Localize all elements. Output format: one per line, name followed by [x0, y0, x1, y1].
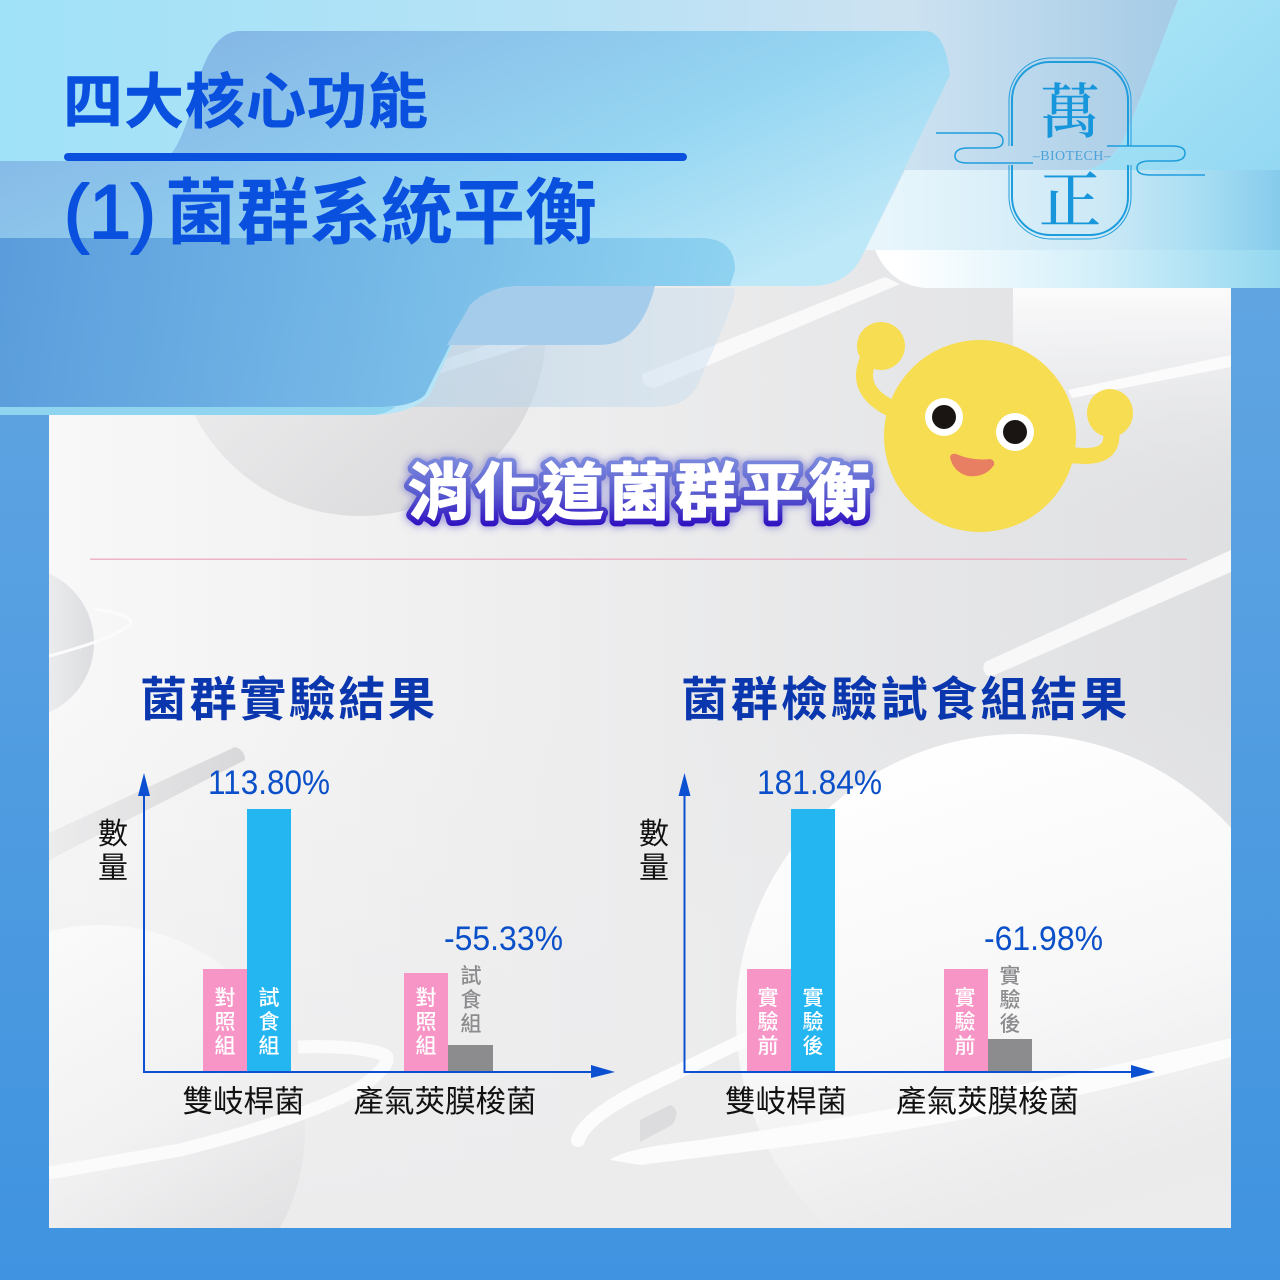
bars: 雙岐桿菌: 組 — [214, 1030, 236, 1060]
divider line — [90, 558, 1187, 560]
axes — [138, 773, 615, 1078]
bars: 產氣莢膜梭菌: 試 — [460, 960, 482, 990]
title line 2: 菌群系統平衡 — [165, 154, 597, 259]
bars: 產氣莢膜梭菌 — [944, 960, 1032, 1071]
bars: 產氣莢膜梭菌: 實 — [1000, 960, 1020, 990]
bars: 產氣莢膜梭菌: 後 — [1000, 1008, 1020, 1038]
y label: 量 — [639, 843, 669, 887]
bar chart: right: 產氣莢膜梭菌 — [896, 1077, 1079, 1121]
chart heading left: 菌群實驗結果 — [140, 661, 438, 730]
bar chart: right: -61.98% — [984, 920, 1103, 958]
bars: 雙岐桿菌: 驗 — [802, 1006, 824, 1036]
bars: 雙岐桿菌: 照 — [214, 1006, 236, 1036]
value labels: 113.80% — [208, 764, 330, 802]
icon: yellow mascot — [857, 322, 1133, 532]
bars: 產氣莢膜梭菌: 實 — [954, 982, 976, 1012]
bars: 產氣莢膜梭菌: 組 — [460, 1008, 482, 1038]
bars: 雙岐桿菌: 試 — [258, 982, 280, 1012]
bars: 產氣莢膜梭菌: 照 — [416, 1006, 436, 1036]
heading: 消化道菌群平衡: 消化道菌群平衡 — [408, 442, 876, 532]
bars: 雙岐桿菌: 食 — [258, 1006, 280, 1036]
y label — [639, 809, 669, 887]
bar chart: right — [639, 764, 1155, 1121]
bars: 雙岐桿菌 — [747, 809, 835, 1071]
bars: 產氣莢膜梭菌: 對 — [416, 982, 436, 1012]
bars: 產氣莢膜梭菌: 驗 — [954, 1006, 976, 1036]
logo: 萬正 BIOTECH: 萬 — [1040, 65, 1100, 151]
y label: 數 — [98, 809, 128, 853]
title divider — [64, 153, 687, 161]
value labels: 181.84% — [757, 764, 882, 802]
bar chart: left: 產氣莢膜梭菌 — [354, 1077, 536, 1121]
y label: 量 — [98, 843, 128, 887]
bars: 產氣莢膜梭菌: 組 — [416, 1030, 436, 1060]
bars: 雙岐桿菌: 組 — [258, 1030, 280, 1060]
y label: 數 — [639, 809, 669, 853]
bars: 雙岐桿菌: 對 — [214, 982, 236, 1012]
title line 2: (1) — [64, 170, 156, 255]
y label — [98, 809, 128, 887]
axes — [678, 773, 1155, 1078]
bar chart: left — [98, 764, 615, 1121]
panel: header background — [0, 0, 1280, 288]
bars: 產氣莢膜梭菌: 食 — [460, 984, 482, 1014]
logo: 萬正 BIOTECH: 正 — [1039, 151, 1101, 240]
chart heading right: 菌群檢驗試食組結果 — [681, 661, 1130, 730]
panel: translucent title cards — [0, 31, 950, 415]
heading: 消化道菌群平衡: 消化道菌群平衡 — [408, 443, 876, 533]
bars: 產氣莢膜梭菌: 前 — [954, 1030, 976, 1060]
bars: 雙岐桿菌: 驗 — [758, 1006, 778, 1036]
logo: 萬正 BIOTECH — [936, 58, 1205, 240]
bar chart: left: -55.33% — [444, 920, 563, 958]
category labels: 雙岐桿菌 — [182, 1077, 304, 1121]
category labels: 雙岐桿菌 — [725, 1077, 847, 1121]
title line 1: 四大核心功能 — [63, 54, 429, 141]
bars: 雙岐桿菌: 實 — [758, 982, 778, 1012]
panel: content background — [49, 250, 1231, 1228]
bars: 雙岐桿菌: 實 — [802, 982, 824, 1012]
bars: 產氣莢膜梭菌 — [404, 960, 493, 1071]
bars: 雙岐桿菌: 前 — [758, 1030, 778, 1060]
logo: 萬正 BIOTECH: –BIOTECH– — [1032, 149, 1112, 164]
heading: 消化道菌群平衡: 消化道菌群平衡 — [408, 443, 876, 533]
bars: 雙岐桿菌: 後 — [802, 1030, 824, 1060]
bars: 產氣莢膜梭菌: 驗 — [1000, 984, 1020, 1014]
bars: 雙岐桿菌 — [203, 809, 291, 1071]
